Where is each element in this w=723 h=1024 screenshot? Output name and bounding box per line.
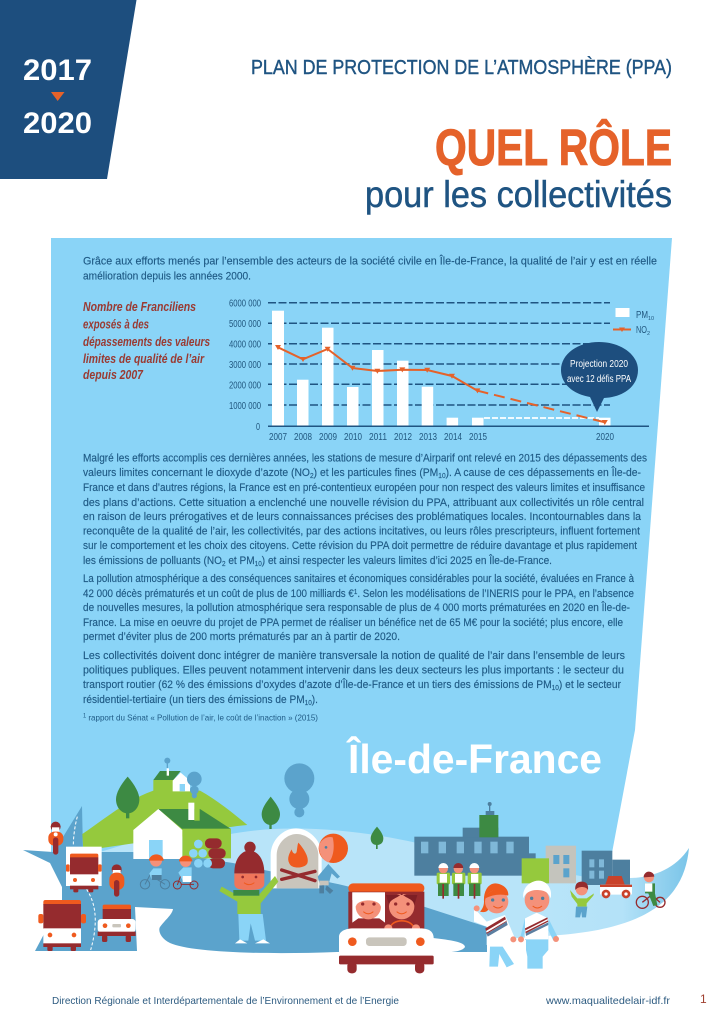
heading: plan name: PLAN DE PROTECTION DE L’ATMOSPHÈRE (PPA): [251, 56, 672, 79]
text block: paragraph on exceedances: ) et les particules fines (PM: [314, 467, 438, 479]
chart: exposure bars and NO2 line: 2014: [444, 432, 462, 443]
scooter middle: [109, 864, 124, 897]
text block: paragraph on health impacts: La pollution atmosphérique a des conséquences sanitaires et économiques considérables pour la société, évaluées en France à: [83, 573, 635, 585]
text block: paragraph on health impacts: 1: [354, 589, 357, 596]
child with hat: [219, 842, 278, 943]
coloured blocks: [522, 846, 630, 885]
chart legend: NO: [636, 325, 647, 336]
child cyclists: [140, 854, 198, 889]
text block: paragraph on exceedances: sur le comportement et les choix des citoyens. Cette révision du PPA doit permettre de réduire davantage et plus rapidement: [83, 540, 637, 552]
text block: paragraph on exceedances: et PM: [226, 555, 255, 567]
chart legend: PM: [636, 310, 648, 321]
page number: 1: [700, 992, 707, 1006]
text block: paragraph on health impacts: 42 000 décès prématurés et un coût de plus de 100 milliards €: [83, 588, 387, 600]
illustration: village and road on the left: [38, 758, 348, 951]
hill: [82, 791, 247, 851]
chart: exposure bars and NO2 line: 2015: [469, 432, 487, 443]
text block: introduction: amélioration depuis les années 2000.: [83, 270, 251, 282]
text block: paragraph on local authorities: Les collectivités doivent donc intégrer de manière transversale la notion de qualité de l’air dans l’ensemble de leurs: [83, 650, 625, 662]
panel: date banner: 2017: [23, 54, 92, 87]
text block: paragraph on local authorities: [83, 650, 625, 707]
text block: paragraph on exceedances: Malgré les efforts accomplis ces dernières années, les stations de mesure d’Airparif ont relevé en 2015 des dépassements des: [83, 452, 647, 464]
chart: exposure bars and NO2 line: 2020: [596, 432, 614, 443]
woman with sash: [474, 883, 516, 967]
small house on hill: [153, 758, 190, 792]
large house: [133, 803, 231, 859]
cyclist right: [636, 872, 665, 908]
callout: projection 2020: Projection 2020: [570, 359, 628, 370]
chart: exposure bars and NO2 line: 2011: [369, 432, 387, 443]
truck top: [66, 847, 102, 892]
scooter left: [48, 822, 63, 855]
text block: paragraph on local authorities: 10: [552, 685, 559, 692]
panel: date banner: 2020: [23, 107, 92, 140]
waving child: [570, 882, 594, 917]
subtitle: pour les collectivités: [365, 174, 672, 215]
smoke large: [284, 763, 314, 817]
text block: paragraph on local authorities: ).: [312, 694, 318, 706]
chart: exposure bars and NO2 line: [229, 298, 649, 443]
title: QUEL RÔLE: [435, 118, 672, 176]
chart: exposure bars and NO2 line: 0: [256, 422, 260, 433]
chart: exposure bars and NO2 line: 2013: [419, 432, 437, 443]
text block: paragraph on local authorities: transport routier (62 % des émissions d’oxydes d’azote d’Île-de-France et un tiers des émissions de PM: [83, 679, 586, 691]
text block: paragraph on health impacts: France. La mise en oeuvre du projet de PPA permet de réaliser un bénéfice net de 65 M€ pour la société; plus encore, elle: [83, 617, 623, 629]
text block: paragraph on exceedances: 10: [255, 561, 262, 568]
red car: [600, 876, 632, 898]
three cyclists: [437, 863, 482, 899]
text block: introduction: Grâce aux efforts menés par l’ensemble des acteurs de la société civile en Île-de-France, la qualité de l’air y est en réelle: [83, 254, 657, 268]
chart legend: 10: [648, 316, 654, 322]
chart heading: depuis 2007: [83, 368, 144, 382]
chart legend: [613, 308, 654, 337]
panel: sky background: [51, 238, 672, 885]
text block: paragraph on exceedances: France et dans d’autres régions, la France est en pré-contentieux européen pour non respect des valeurs limites et insuffisance: [83, 482, 645, 494]
chart: exposure bars and NO2 line: 2009: [319, 432, 337, 443]
text block: paragraph on local authorities: 10: [305, 700, 312, 707]
chart heading: limites de qualité de l’air: [83, 352, 205, 366]
chart: exposure bars and NO2 line: 5000 000: [229, 319, 261, 330]
illustration: landscape ground: [23, 806, 689, 953]
town hall building: [414, 802, 536, 876]
truck bottom: [38, 900, 86, 951]
chart: exposure bars and NO2 line: 2008: [294, 432, 312, 443]
chart: exposure bars and NO2 line: 1000 000: [229, 401, 261, 412]
text block: paragraph on exceedances: 2: [222, 561, 226, 568]
small tree: [371, 827, 383, 849]
chart legend: 2: [647, 331, 650, 337]
chart: exposure bars and NO2 line: 2007: [269, 432, 287, 443]
chart: exposure bars and NO2 line: 4000 000: [229, 340, 261, 350]
text block: paragraph on health impacts: . Selon les modélisations de l’INERIS pour le PPA, en l’absence: [357, 588, 634, 600]
road markings: [73, 817, 95, 950]
wood pile: [189, 838, 226, 868]
chart heading: exposés à des: [83, 318, 149, 332]
illustration: town and people on the right: [339, 802, 665, 973]
van with two passengers: [339, 883, 434, 973]
footnote: 1: [83, 714, 87, 720]
chart: exposure bars and NO2 line: 2012: [394, 432, 412, 443]
tree left: [116, 777, 139, 818]
chart heading: Nombre de Franciliens: [83, 300, 196, 314]
chart: exposure bars and NO2 line: 2000 000: [229, 380, 261, 392]
callout: projection 2020: avec 12 défis PPA: [567, 374, 631, 385]
text block: paragraph on exceedances: des plans d’actions. Cette situation a enclenché une nouvelle révision du PPA, attribuant aux collectivités un rôle central: [83, 497, 644, 509]
text block: paragraph on exceedances: [83, 452, 647, 568]
text block: paragraph on health impacts: de nouvelles mesures, la pollution atmosphérique sera responsable de plus de 4 000 morts prématurées en 2020 en Île-de-: [83, 601, 630, 614]
text block: paragraph on exceedances: reconquête de la qualité de l’air, les collectivités, par des actions incitatives, ou leurs rôles prescripteurs, influent fortement: [83, 526, 640, 538]
text block: paragraph on local authorities: ) et le secteur: [559, 679, 621, 691]
text block: paragraph on exceedances: ) et ainsi respecter les valeurs limites d’ici 2025 en Île-de-France.: [262, 554, 552, 567]
chart: exposure bars and NO2 line: 6000 000: [229, 298, 261, 310]
text block: paragraph on local authorities: résidentiel-tertiaire (un tiers des émissions de PM: [83, 694, 324, 706]
chart: exposure bars and NO2 line: 2010: [344, 432, 362, 443]
tree centre: [262, 797, 280, 829]
footnote: rapport du Sénat « Pollution de l’air, le coût de l’inaction » (2015): [86, 712, 318, 722]
woman by the fire: [318, 834, 348, 894]
text block: paragraph on exceedances: 2: [310, 473, 314, 480]
smoke small: [187, 772, 202, 798]
car: [98, 905, 136, 942]
oven and fire: [271, 828, 322, 888]
text block: paragraph on exceedances: ). A cause de ces dépassements en Île-de-: [446, 466, 641, 479]
text block: paragraph on health impacts: [83, 573, 635, 643]
text block: paragraph on exceedances: les émissions de polluants (NO: [83, 555, 235, 567]
text block: paragraph on local authorities: politiques publiques. Elles peuvent notamment intervenir dans les deux secteurs les plus importants : le secteur du: [83, 664, 624, 676]
chart: exposure bars and NO2 line: 3000 000: [229, 360, 261, 371]
man with sash: [518, 881, 559, 969]
footer: website: www.maqualitedelair-idf.fr: [545, 995, 671, 1007]
text block: introduction: [83, 254, 657, 282]
chart heading: dépassements des valeurs: [83, 335, 210, 349]
callout: projection 2020: [561, 342, 638, 412]
text block: paragraph on exceedances: 10: [438, 473, 446, 480]
footer: organisation: Direction Régionale et Interdépartementale de l’Environnement et de l’Energie: [52, 995, 399, 1007]
text block: paragraph on exceedances: valeurs limites concernant le dioxyde d’azote (NO: [83, 467, 325, 479]
text block: paragraph on exceedances: en raison de leurs prérogatives et de leurs connaissances précises des problématiques locales. Incontournables dans la: [83, 511, 642, 523]
heading: region name: Île-de-France: [346, 736, 602, 782]
chart heading: [83, 300, 210, 382]
text block: paragraph on health impacts: permet d’éviter plus de 200 morts prématurés par an à partir de 2020.: [83, 631, 400, 643]
panel: date banner: [0, 0, 136, 179]
